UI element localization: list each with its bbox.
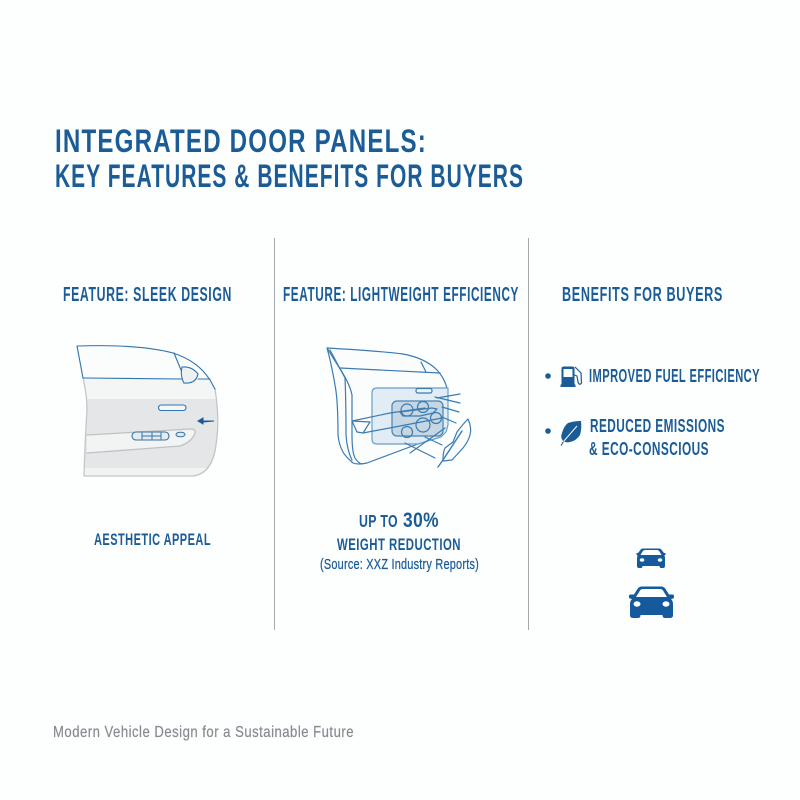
stat: up to 30% [359,509,439,532]
panel: benefits for buyers [545,284,760,618]
stat: up to 30%: 30% [403,509,439,532]
icon: large car [629,586,674,618]
stat: up to 30%: UP TO [359,511,398,531]
illustration: door cutaway with feather [327,348,471,467]
bullet: reduced emissions: & ECO-CONSCIOUS [589,439,709,459]
title: KEY FEATURES & BENEFITS FOR BUYERS [55,158,524,194]
label: weight reduction: WEIGHT REDUCTION [337,535,461,554]
panel: sleek design [63,284,232,549]
panel: lightweight efficiency [283,284,519,573]
icon: leaf [561,421,581,446]
bullet: fuel efficiency [545,366,760,387]
heading: lightweight efficiency: FEATURE: LIGHTWEIGHT EFFICIENCY [283,284,519,306]
title: INTEGRATED DOOR PANELS: [55,123,427,159]
heading: sleek design: FEATURE: SLEEK DESIGN [63,284,232,306]
bullet: reduced emissions: REDUCED EMISSIONS [590,416,725,436]
illustration: sleek door [76,346,221,477]
label: aesthetic appeal: AESTHETIC APPEAL [94,530,211,549]
source note: (Source: XXZ Industry Reports) [320,556,479,573]
icon: fuel pump [560,366,582,387]
title [55,123,524,194]
icon: small car [636,548,666,568]
bullet: reduced emissions [545,416,725,459]
arrow: door surface [198,418,214,424]
footer: Modern Vehicle Design for a Sustainable Future [53,724,354,741]
